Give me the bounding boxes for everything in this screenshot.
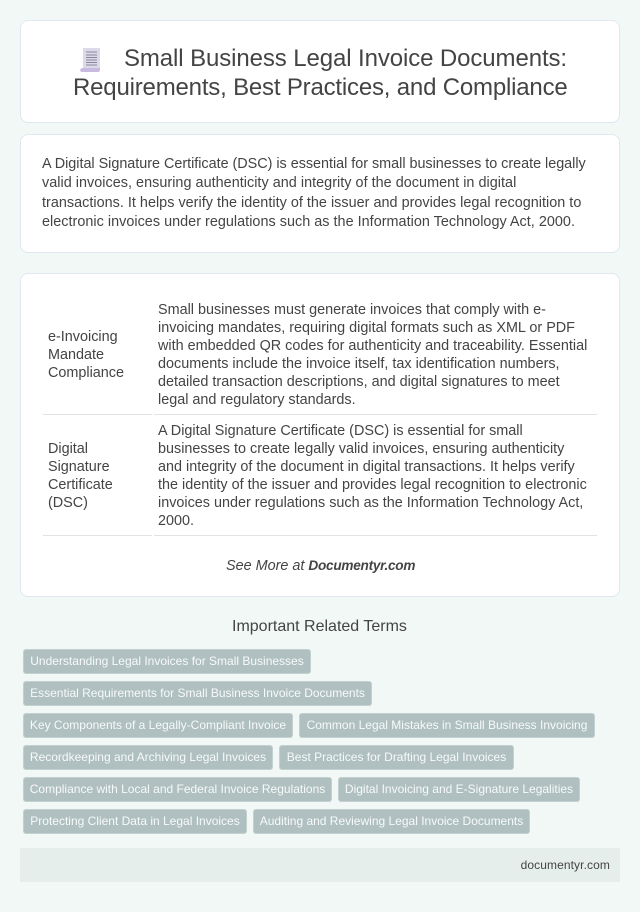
panel: table: Certificate bbox=[48, 477, 113, 493]
panel: table: Digital bbox=[48, 441, 88, 457]
tags: related terms: Protecting Client Data in Legal Invoices bbox=[30, 814, 240, 828]
footer source: documentyr.com bbox=[521, 858, 610, 872]
tags: related terms: Digital Invoicing and E-Signature Legalities bbox=[345, 782, 573, 796]
row: e-Invoicing text bbox=[158, 302, 587, 408]
row: e-Invoicing label bbox=[48, 329, 124, 381]
panel: introduction bbox=[20, 134, 620, 253]
panel: introduction: valid invoices, ensuring authenticity and integrity of the document in digital bbox=[42, 175, 516, 191]
heading: related terms: Important Related Terms bbox=[232, 618, 407, 635]
panel: title card: Requirements, Best Practices, and Compliance bbox=[73, 74, 568, 101]
tags: related terms: Common Legal Mistakes in Small Business Invoicing bbox=[307, 718, 587, 732]
tags: related terms: Understanding Legal Invoices for Small Businesses bbox=[30, 654, 304, 668]
panel: table: Signature bbox=[48, 459, 110, 475]
icon: invoice receipt bbox=[80, 48, 100, 72]
panel: table: (DSC) bbox=[48, 495, 88, 511]
panel: table: businesses to create legally valid invoices, ensuring authenticity bbox=[158, 441, 564, 457]
title bbox=[73, 45, 568, 101]
panel: introduction: A Digital Signature Certificate (DSC) is essential for small businesses to create legally bbox=[42, 156, 586, 172]
panel: table: the identity of the issuer and provides legal recognition to electronic bbox=[158, 477, 587, 493]
panel: table: with embedded QR codes for authenticity and traceability. Essential bbox=[158, 338, 587, 354]
panel: title card bbox=[20, 20, 620, 123]
panel: table: documents include the invoice itself, tax identification numbers, bbox=[158, 356, 560, 372]
tags: related terms: Essential Requirements for Small Business Invoice Documents bbox=[30, 686, 365, 700]
panel: table: legal and regulatory standards. bbox=[158, 392, 356, 408]
panel: table: detailed transaction descriptions, and digital signatures to meet bbox=[158, 374, 560, 390]
panel: table: A Digital Signature Certificate (DSC) is essential for small bbox=[158, 423, 523, 439]
panel: introduction: electronic invoices under regulations such as the Information Technology Act, 2000. bbox=[42, 214, 575, 230]
panel: table: Compliance bbox=[48, 365, 124, 381]
panel: table: e-Invoicing bbox=[48, 329, 118, 345]
tags: related terms: Recordkeeping and Archiving Legal Invoices bbox=[30, 750, 266, 764]
tags: related terms: Compliance with Local and Federal Invoice Regulations bbox=[30, 782, 325, 796]
tags: related terms: Key Components of a Legally-Compliant Invoice bbox=[30, 718, 286, 732]
panel: table bbox=[20, 273, 620, 597]
panel: table: invoices under regulations such as the Information Technology Act, bbox=[158, 495, 583, 511]
see more link: See More at Documentyr.com bbox=[226, 558, 415, 574]
tags: related terms: Auditing and Reviewing Legal Invoice Documents bbox=[260, 814, 523, 828]
row: DSC label bbox=[48, 441, 113, 511]
panel: table: and integrity of the document in digital transactions. It helps verify bbox=[158, 459, 575, 475]
panel: table: 2000. bbox=[158, 513, 194, 529]
panel: table: Small businesses must generate invoices that comply with e- bbox=[158, 302, 546, 318]
panel: table: invoicing mandates, requiring digital formats such as XML or PDF bbox=[158, 320, 575, 336]
text block: intro bbox=[42, 156, 586, 230]
panel: title card: Small Business Legal Invoice Documents: bbox=[124, 45, 567, 72]
tags: related terms bbox=[23, 649, 595, 834]
panel: introduction: transactions. It helps verify the identity of the issuer and provides legal recognition to bbox=[42, 195, 581, 211]
tags: related terms: Best Practices for Drafting Legal Invoices bbox=[287, 750, 506, 764]
row: DSC text bbox=[158, 423, 587, 529]
footer bar bbox=[20, 848, 620, 882]
panel: table: Mandate bbox=[48, 347, 104, 363]
